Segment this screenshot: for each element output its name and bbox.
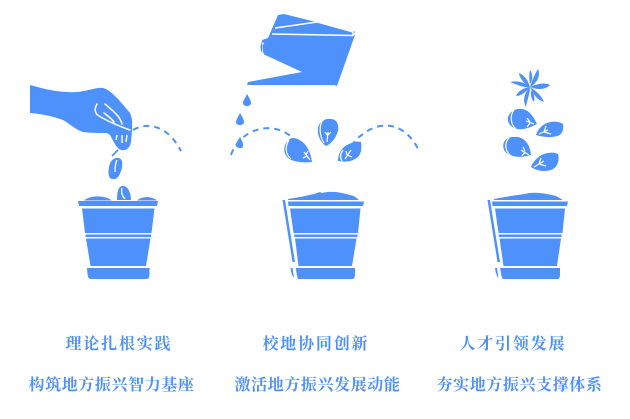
caption 1 heading: 理论扎根实践 <box>66 336 172 353</box>
icon: hand dropping seeds <box>30 85 132 156</box>
icon: star flower sprout <box>510 69 550 107</box>
caption 1 subheading: 构筑地方振兴智力基座 <box>28 377 195 394</box>
icon: leaf seed middle <box>318 119 338 146</box>
icon: seed leaf top left <box>508 109 537 129</box>
arc: dashed path from hand <box>133 126 181 151</box>
caption 2 heading: 校地协同创新 <box>262 336 369 353</box>
icon: watering can <box>247 14 356 86</box>
caption 3 subheading: 夯实地方振兴支撑体系 <box>436 377 603 394</box>
icon: leaf seed right <box>338 142 361 162</box>
arc: dashed left <box>231 128 293 155</box>
icon: leaf seed left <box>284 138 312 162</box>
pot 3 <box>488 193 568 279</box>
icon: water drops <box>236 94 251 148</box>
pot 1 <box>78 186 158 279</box>
pot 2 <box>282 192 364 279</box>
icon: falling seed <box>108 158 122 179</box>
icon: seed leaf bottom right <box>531 153 559 171</box>
icon: seed leaf top right <box>536 122 563 137</box>
caption 2 subheading: 激活地方振兴发展动能 <box>234 377 401 394</box>
caption 3 heading: 人才引领发展 <box>460 336 566 353</box>
arc: dashed right <box>351 126 419 151</box>
icon: seed leaf bottom left <box>503 137 531 157</box>
